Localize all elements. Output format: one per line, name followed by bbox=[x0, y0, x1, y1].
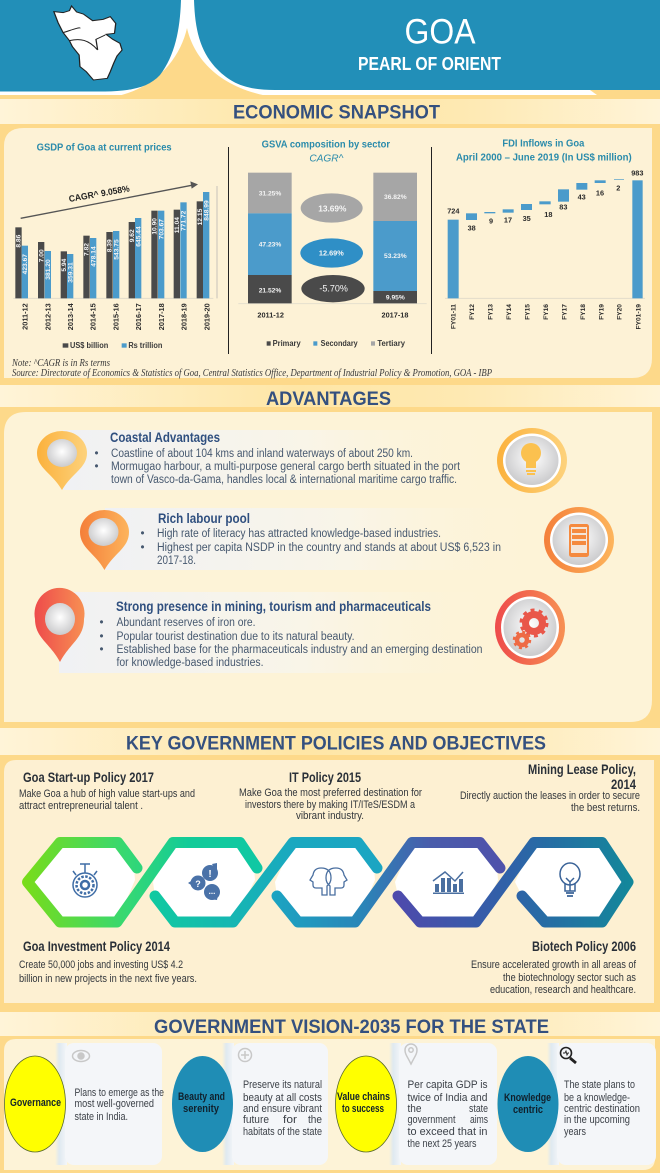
vision: beauty: serenity bbox=[183, 1103, 220, 1115]
year labels: FY01-19 bbox=[635, 304, 642, 330]
heading: economic snapshot: ECONOMIC SNAPSHOT bbox=[233, 102, 440, 124]
advantage text: • bbox=[100, 617, 104, 629]
year labels: FY20 bbox=[617, 304, 624, 320]
2011-12 stacked bar: 21.52% bbox=[259, 287, 281, 294]
US$ values: 10.90 bbox=[152, 218, 159, 235]
advantage text bbox=[100, 617, 482, 669]
advantage text: • bbox=[94, 461, 99, 473]
gears icon bbox=[495, 590, 565, 665]
year labels: 2012-13 bbox=[43, 303, 52, 330]
CAGR subtitle: CAGR^ bbox=[309, 154, 344, 165]
Rs values bbox=[22, 200, 210, 283]
US$ values: 9.62 bbox=[129, 229, 136, 242]
bulb icon bbox=[497, 428, 567, 493]
policy: biotech bbox=[471, 938, 637, 996]
waterfall values: 18 bbox=[544, 210, 552, 219]
legend: Rs trillion bbox=[128, 341, 162, 350]
year labels: FY16 bbox=[543, 304, 550, 320]
US$ values: 11.04 bbox=[174, 217, 181, 233]
advantage text bbox=[140, 528, 501, 567]
strand green bbox=[28, 842, 257, 922]
chart title: FDI Inflows in Goa bbox=[502, 139, 585, 150]
heading: economic snapshot bbox=[0, 99, 660, 124]
phone icon bbox=[544, 507, 614, 573]
vision: value chains: aims bbox=[470, 1114, 488, 1126]
panel: government vision bbox=[4, 1039, 656, 1170]
panel: policies bbox=[4, 760, 654, 1003]
advantage text: High rate of literacy has attracted knowledge-based industries. bbox=[157, 528, 441, 540]
US$ values: 7.00 bbox=[38, 249, 45, 262]
Rs values: 478.14 bbox=[90, 246, 97, 267]
year labels: FY17 bbox=[561, 304, 568, 320]
icon: eye bbox=[72, 1050, 90, 1062]
heading: key government policies: KEY GOVERNMENT POLICIES AND OBJECTIVES bbox=[126, 734, 546, 754]
year labels: 2015-16 bbox=[112, 303, 121, 330]
policy: IT: vibrant industry. bbox=[296, 810, 364, 822]
CAGR ovals: 12.69% bbox=[319, 249, 344, 258]
advantage text: Highest per capita NSDP in the country and stands at about US$ 6,523 in bbox=[157, 542, 501, 554]
yellow peak bbox=[120, 28, 265, 96]
policy: investment: Goa Investment Policy 2014 bbox=[23, 938, 170, 954]
source: Source: Directorate of Economics & Statistics of Goa, Central Statistics Office, Department of Industrial Policy & Promotion, GOA - IBP bbox=[12, 368, 492, 379]
legend: Tertiary bbox=[377, 339, 406, 348]
2011-12 stacked bar bbox=[248, 173, 292, 303]
vision: value chains bbox=[336, 1043, 497, 1165]
Rs values: 771.72 bbox=[181, 210, 188, 231]
policy: start-up: attract entrepreneurial talent . bbox=[19, 800, 143, 812]
advantage title: Strong presence in mining, tourism and pharmaceuticals bbox=[116, 599, 431, 614]
panel: advantages bbox=[4, 412, 652, 722]
icon: magnifier bbox=[560, 1048, 576, 1063]
icon: stopwatch bbox=[73, 864, 97, 897]
policy: mining: 2014 bbox=[611, 776, 636, 792]
legend: US$ billion bbox=[70, 341, 108, 350]
policy: IT: Make Goa the most preferred destination for bbox=[239, 787, 422, 799]
icon: speech blades: ... bbox=[209, 887, 215, 896]
vision: value chains: government bbox=[408, 1114, 456, 1126]
2017-18 stacked bar: 36.82% bbox=[384, 194, 407, 201]
legend: Primary bbox=[273, 339, 301, 348]
heading: key government policies bbox=[0, 728, 660, 755]
policy: IT: IT Policy 2015 bbox=[289, 769, 361, 785]
year labels bbox=[257, 310, 408, 319]
vision: beauty: future bbox=[243, 1114, 269, 1126]
advantage text: town of Vasco-da-Gama, handles local & international maritime cargo traffic. bbox=[111, 474, 457, 486]
vision: knowledge: centric bbox=[513, 1104, 543, 1116]
vision: value chains: to success bbox=[342, 1103, 384, 1115]
year labels: FY12 bbox=[469, 304, 476, 320]
vision: knowledge: The state plans to bbox=[564, 1079, 635, 1091]
Rs values: 645.44 bbox=[135, 226, 142, 247]
vision: knowledge: years bbox=[564, 1126, 586, 1138]
icon: plus circle bbox=[238, 1048, 252, 1062]
Rs values: 381.20 bbox=[45, 259, 52, 280]
CAGR ovals bbox=[300, 193, 365, 302]
US$ values: 8.39 bbox=[107, 239, 114, 252]
strand blue bbox=[277, 842, 500, 922]
strand teal bbox=[155, 842, 377, 922]
divider line bbox=[228, 147, 230, 354]
waterfall values: 724 bbox=[447, 206, 460, 215]
CAGR arrow bbox=[21, 181, 198, 218]
vision: knowledge: Knowledge bbox=[504, 1092, 551, 1104]
year labels: FY01-11 bbox=[451, 304, 458, 329]
chart subtitle: April 2000 – June 2019 (In US$ million) bbox=[456, 153, 632, 164]
vision: knowledge: in the upcoming bbox=[564, 1114, 630, 1126]
waterfall values: 2 bbox=[616, 183, 620, 192]
heading: advantages: ADVANTAGES bbox=[266, 389, 391, 410]
vision: value chains: twice of India and bbox=[408, 1092, 488, 1104]
Rs values: 848.99 bbox=[203, 200, 210, 221]
advantage text: Established base for the pharmaceuticals industry and an emerging destination bbox=[116, 644, 482, 656]
Rs values: 543.75 bbox=[113, 239, 120, 260]
chart: GSVA composition bbox=[238, 139, 427, 348]
icon: speech blades bbox=[188, 863, 220, 900]
2011-12 stacked bar: 47.23% bbox=[259, 242, 281, 249]
year labels: 2016-17 bbox=[134, 303, 143, 330]
year labels: 2011-12 bbox=[20, 303, 29, 330]
CAGR label: CAGR^ 9.058% bbox=[68, 183, 130, 204]
advantage text: • bbox=[140, 528, 145, 540]
vision: beauty: Preserve its natural bbox=[243, 1079, 322, 1091]
US$ billion bars bbox=[15, 201, 203, 298]
waterfall values: 35 bbox=[523, 214, 531, 223]
right blue shape bbox=[194, 0, 660, 90]
icon: bar chart bbox=[433, 872, 464, 894]
header white backing bbox=[0, 0, 660, 95]
2017-18 stacked bar bbox=[373, 173, 417, 303]
advantage text: 2017-18. bbox=[157, 555, 196, 567]
header bbox=[0, 0, 660, 96]
waterfall values: 16 bbox=[596, 188, 604, 197]
policy: investment: Create 50,000 jobs and investing US$ 4.2 bbox=[19, 959, 183, 971]
vision: beauty: Beauty and bbox=[178, 1091, 225, 1103]
vision: beauty: habitats of the state bbox=[243, 1126, 322, 1138]
policy: start-up: Make Goa a hub of high value start-ups and bbox=[19, 788, 195, 800]
subtitle: PEARL OF ORIENT bbox=[358, 54, 501, 74]
heading: government vision bbox=[0, 1012, 660, 1038]
vision: value chains: state bbox=[469, 1103, 488, 1115]
waterfall values: 9 bbox=[489, 217, 493, 226]
panel: economic snapshot bbox=[4, 128, 652, 379]
policy: biotech: education, research and healthcare. bbox=[490, 984, 636, 996]
advantage text: • bbox=[94, 448, 99, 460]
policy: mining bbox=[460, 761, 640, 814]
pin icon bbox=[34, 588, 84, 662]
US$ values: 5.94 bbox=[61, 258, 68, 272]
year labels bbox=[451, 304, 642, 330]
year labels: 2017-18 bbox=[382, 310, 408, 319]
year labels: FY13 bbox=[488, 304, 495, 320]
waterfall values: 17 bbox=[504, 216, 512, 225]
vision: beauty: and ensure vibrant bbox=[243, 1103, 322, 1115]
advantage text: • bbox=[100, 631, 104, 643]
Goa map bbox=[54, 6, 122, 80]
vision: governance bbox=[4, 1043, 164, 1165]
CAGR ovals: -5.70% bbox=[319, 284, 348, 294]
heading: advantages bbox=[0, 385, 660, 410]
advantage text: • bbox=[100, 644, 104, 656]
policy: start-up: Goa Start-up Policy 2017 bbox=[23, 769, 154, 785]
US$ values: 8.86 bbox=[16, 234, 23, 248]
advantage text: Coastline of about 104 kms and inland waterways of about 250 km. bbox=[111, 448, 413, 460]
waterfall values: 983 bbox=[631, 169, 643, 178]
vision: governance: Governance bbox=[10, 1097, 61, 1109]
note: Note: ^CAGR is in Rs terms bbox=[11, 358, 110, 369]
chart: GSDP of Goa bbox=[13, 143, 217, 350]
hexagon fills bbox=[27, 842, 628, 922]
advantage text bbox=[94, 448, 461, 486]
vision: knowledge: be a knowledge- bbox=[564, 1092, 630, 1104]
hexagon chain bbox=[27, 842, 628, 922]
vision: governance: Plans to emerge as the bbox=[74, 1087, 164, 1099]
icon: speech blades: ? bbox=[195, 879, 201, 889]
2017-18 stacked bar: 53.23% bbox=[384, 253, 407, 260]
year labels: 2017-18 bbox=[157, 303, 166, 330]
waterfall values: 38 bbox=[468, 224, 476, 233]
vision: value chains: the bbox=[408, 1103, 422, 1115]
policy: investment: billion in new projects in the next five years. bbox=[19, 973, 197, 985]
Rs trillion bars bbox=[22, 192, 209, 298]
year labels: FY19 bbox=[598, 304, 605, 320]
vision: knowledge bbox=[498, 1043, 656, 1165]
Rs values: 359.31 bbox=[67, 262, 74, 283]
vision: beauty: for bbox=[283, 1114, 297, 1126]
advantage: labour bbox=[80, 507, 614, 573]
vision: knowledge: centric destination bbox=[564, 1103, 640, 1115]
2011-12 stacked bar: 31.25% bbox=[259, 191, 281, 198]
advantage title: Rich labour pool bbox=[158, 511, 250, 526]
icon: two heads bbox=[310, 868, 347, 895]
advantage text: Popular tourist destination due to its natural beauty. bbox=[116, 631, 354, 643]
advantage text: Mormugao harbour, a multi-purpose general cargo berth situated in the port bbox=[111, 461, 461, 473]
vision: beauty bbox=[172, 1043, 328, 1165]
2017-18 stacked bar: 9.95% bbox=[386, 295, 405, 302]
vision: beauty: beauty at all costs bbox=[243, 1092, 322, 1104]
year labels: FY15 bbox=[524, 304, 531, 320]
policy: mining: the best returns. bbox=[571, 802, 640, 814]
vision: value chains: Per capita GDP is bbox=[408, 1079, 488, 1091]
icon: bulb bbox=[560, 863, 580, 896]
Rs values: 423.67 bbox=[22, 254, 29, 274]
policy: biotech: Biotech Policy 2006 bbox=[532, 938, 636, 954]
advantage text: • bbox=[140, 542, 145, 554]
year labels: 2011-12 bbox=[257, 310, 284, 319]
year labels bbox=[20, 302, 211, 330]
legend: Secondary bbox=[321, 339, 358, 348]
year labels: 2013-14 bbox=[66, 302, 75, 330]
waterfall values: 83 bbox=[559, 202, 567, 211]
year labels: 2014-15 bbox=[89, 303, 98, 330]
year labels: 2018-19 bbox=[179, 303, 188, 330]
vision: value chains: to exceed that in bbox=[408, 1126, 488, 1138]
waterfall values bbox=[447, 169, 643, 233]
chart title: GSVA composition by sector bbox=[262, 139, 390, 150]
CAGR ovals: 13.69% bbox=[318, 203, 347, 213]
Rs values: 703.67 bbox=[158, 219, 165, 239]
advantage text: for knowledge-based industries. bbox=[116, 657, 264, 669]
policy: IT: investors there by making IT/ITeS/ESDM a bbox=[245, 799, 415, 811]
vision: value chains: the next 25 years bbox=[408, 1138, 477, 1150]
advantage text: Abundant reserves of iron ore. bbox=[116, 617, 256, 629]
divider line bbox=[430, 147, 432, 354]
waterfall values: 43 bbox=[578, 192, 586, 201]
pin icon bbox=[37, 431, 87, 490]
pin icon bbox=[80, 510, 129, 570]
chart title: GSDP of Goa at current prices bbox=[37, 143, 172, 154]
year labels: 2019-20 bbox=[202, 303, 211, 330]
waterfall bars bbox=[448, 179, 643, 298]
vision: value chains: Value chains bbox=[337, 1091, 390, 1103]
advantage: coastal bbox=[37, 428, 567, 493]
title GOA: GOA bbox=[404, 12, 476, 52]
legend bbox=[267, 339, 406, 348]
advantage: mining tourism pharma bbox=[34, 588, 565, 673]
policy: biotech: the biotechnology sector such as bbox=[503, 972, 636, 984]
US$ values bbox=[16, 208, 204, 272]
vision: governance: most well-governed bbox=[74, 1098, 154, 1110]
advantage title: Coastal Advantages bbox=[110, 430, 220, 445]
icon: speech blades: ! bbox=[208, 869, 212, 880]
legend bbox=[63, 341, 162, 350]
icon: map pin bbox=[405, 1044, 417, 1064]
heading: government vision: GOVERNMENT VISION-2035 FOR THE STATE bbox=[154, 1017, 549, 1038]
US$ values: 7.82 bbox=[84, 243, 91, 256]
strand purple bbox=[398, 842, 628, 922]
chart: FDI inflows bbox=[445, 139, 645, 330]
policy: IT bbox=[239, 769, 422, 822]
year labels: FY18 bbox=[580, 304, 587, 320]
policy: start-up bbox=[19, 769, 195, 812]
US$ values: 12.15 bbox=[197, 208, 204, 225]
policy: investment bbox=[19, 938, 197, 985]
left blue shape bbox=[0, 0, 181, 92]
vision: beauty: the bbox=[308, 1114, 322, 1126]
vision: governance: state in India. bbox=[74, 1111, 128, 1123]
year labels: FY14 bbox=[506, 304, 513, 320]
